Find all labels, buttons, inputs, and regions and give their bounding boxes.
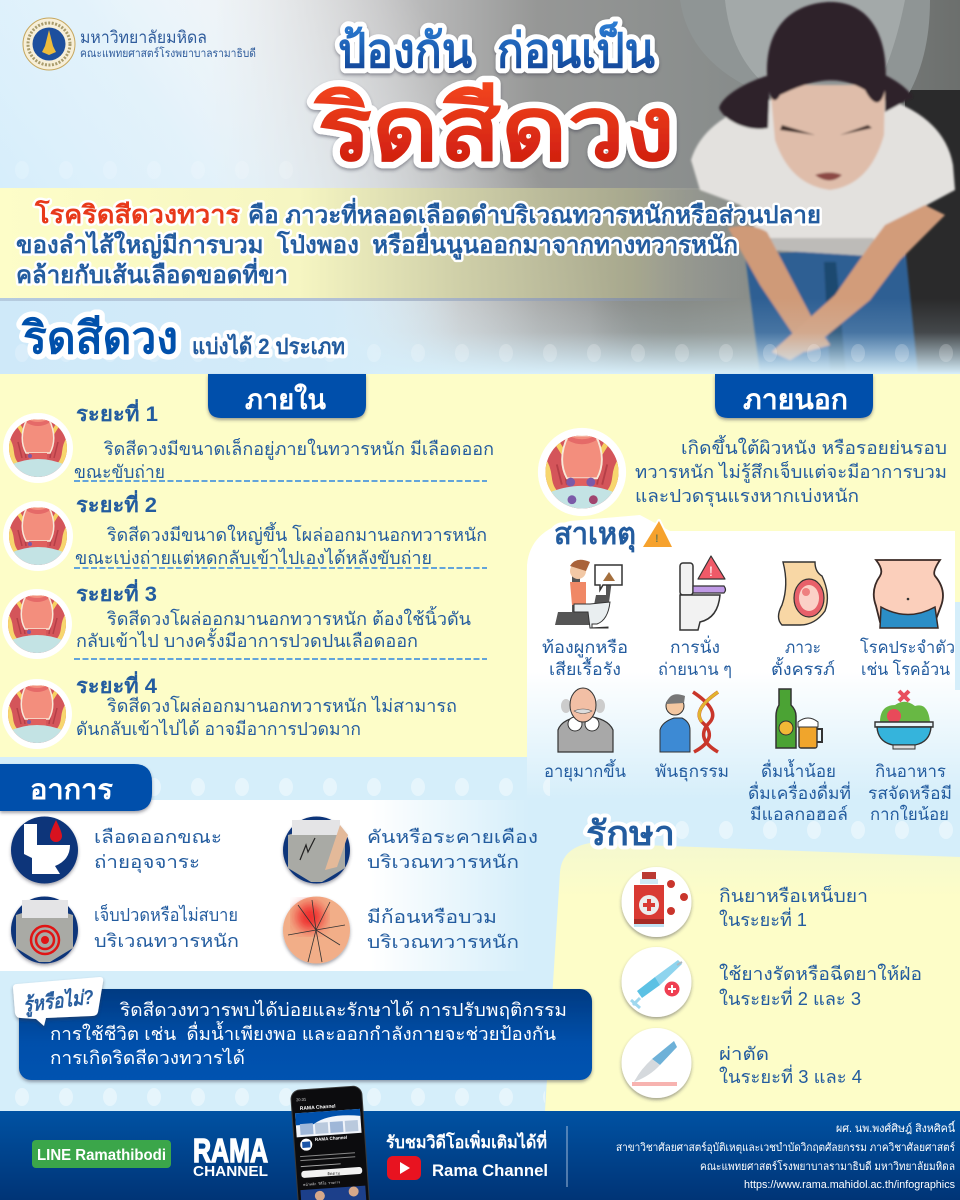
heading: causes: ! bbox=[655, 533, 659, 545]
symptom: pain bbox=[11, 896, 239, 964]
stage 2: ระยะที่ 2 bbox=[76, 489, 157, 517]
cause: constipation bbox=[542, 560, 628, 679]
stage 1 bbox=[3, 398, 494, 483]
phone mockup: 20:31 bbox=[296, 1097, 307, 1102]
heading: treatment: รักษา bbox=[586, 815, 675, 853]
badge: LINE: LINE Ramathibodi bbox=[37, 1147, 166, 1164]
cause: low fiber food: กากใยน้อย bbox=[870, 804, 949, 824]
tab: internal bbox=[208, 374, 366, 418]
panel: external type bbox=[538, 374, 947, 516]
callout: did you know: ริดสีดวงทวารพบได้บ่อยและรักษาได้ การปรับพฤติกรรม bbox=[120, 999, 567, 1020]
title: ป้องกัน ก่อนเป็น bbox=[338, 21, 655, 78]
symptom: lump bbox=[283, 896, 519, 964]
cause: constipation: ท้องผูกหรือ bbox=[542, 638, 628, 658]
heading: two types bbox=[21, 314, 345, 363]
stage 3: ระยะที่ 3 bbox=[76, 578, 157, 606]
callout: did you know: การเกิดริดสีดวงทวารได้ bbox=[50, 1047, 245, 1068]
symptom: itching bbox=[283, 816, 538, 884]
phone mockup: RAMA Channel bbox=[315, 1135, 347, 1142]
title bbox=[313, 21, 675, 180]
stage 2 bbox=[3, 489, 487, 571]
illustration: woman bent over in pain bbox=[691, 2, 955, 374]
panel: internal stages bbox=[2, 374, 494, 749]
stage 2: ริดสีดวงมีขนาดใหญ่ขึ้น โผล่ออกมานอกทวารหนัก bbox=[107, 522, 487, 545]
cause: pregnancy: ภาวะ bbox=[785, 638, 821, 657]
cause: low fiber food bbox=[868, 691, 952, 824]
stage 1: ขณะขับถ่าย bbox=[74, 462, 165, 482]
stage 4 bbox=[2, 670, 457, 749]
cause: obesity bbox=[860, 560, 955, 679]
cause: alcohol: ดื่มน้ำน้อย bbox=[761, 759, 836, 781]
hero fade to blue bbox=[0, 298, 960, 374]
symptom: lump: บริเวณทวารหนัก bbox=[367, 932, 519, 952]
cause: alcohol: ดื่มเครื่องดื่มที่ bbox=[748, 781, 851, 803]
symptom: bleeding: ถ่ายอุจจาระ bbox=[94, 852, 200, 873]
treatment: injection: ในระยะที่ 2 และ 3 bbox=[719, 986, 861, 1009]
treatment: injection: ใช้ยางรัดหรือฉีดยาให้ฝ่อ bbox=[719, 963, 922, 984]
cause: alcohol bbox=[748, 689, 851, 824]
cause: long sitting: ถ่ายนาน ๆ bbox=[658, 660, 732, 679]
intro text bbox=[16, 197, 821, 289]
cause: genetics: พันธุกรรม bbox=[655, 762, 729, 782]
cause: obesity: เช่น โรคอ้วน bbox=[861, 659, 950, 679]
heading: two types: แบ่งได้ 2 ประเภท bbox=[192, 333, 345, 359]
speech bubble bbox=[13, 977, 103, 1026]
stage 4: ดันกลับเข้าไปได้ อาจมีอาการปวดมาก bbox=[76, 718, 361, 739]
credits: ผศ. นพ.พงศ์ศิษฎ์ สิงหศิคนี์ bbox=[836, 1120, 956, 1135]
cause: pregnancy bbox=[771, 562, 835, 679]
icon: YouTube bbox=[387, 1156, 421, 1180]
stage 1: ริดสีดวงมีขนาดเล็กอยู่ภายในทวารหนัก มีเลือดออก bbox=[104, 437, 494, 460]
heading: causes: สาเหตุ bbox=[554, 518, 636, 553]
tab: symptoms: อาการ bbox=[30, 774, 113, 805]
logo: Rama Channel: RAMA bbox=[193, 1132, 268, 1169]
symptom: bleeding: เลือดออกขณะ bbox=[94, 827, 222, 847]
panel: causes bbox=[542, 518, 955, 824]
cause: low fiber food: กินอาหาร bbox=[875, 762, 946, 781]
treatment: injection bbox=[622, 947, 922, 1017]
title: ริดสีดวง bbox=[313, 80, 675, 180]
footer bbox=[0, 1086, 960, 1200]
heading: two types: ริดสีดวง bbox=[21, 314, 178, 363]
cause: low fiber food: รสจัดหรือมี bbox=[868, 784, 952, 803]
symptom: lump: มีก้อนหรือบวม bbox=[367, 907, 497, 927]
tab: external bbox=[715, 374, 873, 418]
treatment: medicine bbox=[622, 867, 868, 937]
callout: did you know bbox=[13, 977, 592, 1080]
video call to action: Rama Channel bbox=[432, 1161, 548, 1180]
credits bbox=[616, 1120, 956, 1191]
treatment: surgery: ในระยะที่ 3 และ 4 bbox=[719, 1064, 862, 1087]
tab: external: ภายนอก bbox=[743, 384, 848, 415]
icon: external hemorrhoid bbox=[538, 428, 626, 516]
phone mockup bbox=[290, 1086, 370, 1200]
logo: Rama Channel: CHANNEL bbox=[193, 1163, 268, 1180]
external description: ทวารหนัก ไม่รู้สึกเจ็บแต่จะมีอาการบวม bbox=[635, 460, 947, 483]
stage 4: ระยะที่ 4 bbox=[76, 670, 157, 698]
cause: old age bbox=[544, 688, 626, 782]
phone mockup: RAMA Channel bbox=[300, 1103, 336, 1112]
treatment: surgery: ผ่าตัด bbox=[719, 1044, 769, 1064]
logo: คณะแพทยศาสตร์โรงพยาบาลรามาธิบดี bbox=[80, 46, 256, 60]
treatment: medicine: กินยาหรือเหน็บยา bbox=[719, 884, 868, 906]
external description: เกิดขึ้นใต้ผิวหนัง หรือรอยย่นรอบ bbox=[681, 435, 947, 458]
badge: LINE bbox=[32, 1140, 171, 1168]
cause: obesity: โรคประจำตัว bbox=[860, 637, 955, 657]
cause: long sitting bbox=[658, 556, 732, 679]
stage 3: กลับเข้าไป บางครั้งมีอาการปวดปนเลือดออก bbox=[76, 628, 418, 651]
cause: long sitting: ! bbox=[709, 563, 713, 579]
intro text: โรคริดสีดวงทวาร bbox=[34, 199, 241, 229]
external description: และปวดรุนแรงหากเบ่งหนัก bbox=[635, 486, 859, 507]
cause: old age: อายุมากขึ้น bbox=[544, 759, 626, 782]
phone mockup: ติดตาม bbox=[327, 1170, 341, 1176]
panel: causes background bbox=[527, 515, 960, 800]
logo bbox=[23, 18, 256, 70]
symptom: itching: คันหรือระคายเคือง bbox=[367, 827, 538, 847]
video call to action: รับชมวิดีโอเพิ่มเติมได้ที่ bbox=[386, 1130, 547, 1152]
panel: treatment bbox=[545, 815, 960, 1111]
hero photo background bbox=[0, 0, 960, 374]
symptom: pain: บริเวณทวารหนัก bbox=[94, 931, 239, 951]
stage 3 bbox=[2, 578, 471, 659]
phone mockup: หน้าหลัก วิดีโอ รายการ bbox=[303, 1179, 340, 1187]
logo: มหาวิทยาลัยมหิดล bbox=[80, 28, 207, 47]
symptom: pain: เจ็บปวดหรือไม่สบาย bbox=[94, 903, 238, 925]
stage 4: ริดสีดวงโผล่ออกมานอกทวารหนัก ไม่สามารถ bbox=[107, 695, 457, 716]
logo: Rama Channel bbox=[193, 1132, 268, 1180]
cause: constipation: เสียเรื้อรัง bbox=[549, 657, 621, 679]
lower background dots bbox=[0, 777, 960, 1107]
cause: long sitting: การนั่ง bbox=[670, 635, 720, 657]
yellow content background bbox=[0, 374, 960, 602]
tab: internal: ภายใน bbox=[245, 383, 326, 415]
cause: genetics bbox=[655, 692, 729, 782]
video call to action bbox=[386, 1130, 548, 1180]
credits: https://www.rama.mahidol.ac.th/infographics bbox=[744, 1179, 955, 1191]
treatment: medicine: ในระยะที่ 1 bbox=[719, 907, 807, 930]
speech bubble: รู้หรือไม่? bbox=[22, 984, 95, 1018]
symptom: itching: บริเวณทวารหนัก bbox=[367, 852, 519, 872]
panel: symptoms bbox=[0, 764, 538, 971]
intro text: คล้ายกับเส้นเลือดขอดที่ขา bbox=[16, 257, 288, 289]
intro text: ของลำไส้ใหญ่มีการบวม โป่งพอง หรือยื่นนูนออกมาจากทางทวารหนัก bbox=[16, 227, 738, 260]
treatment: surgery bbox=[622, 1028, 862, 1098]
callout: did you know: การใช้ชีวิต เช่น ดื่มน้ำเพียงพอ และออกกำลังกายจะช่วยป้องกัน bbox=[50, 1021, 556, 1044]
heading: causes bbox=[554, 518, 672, 553]
stage 1: ระยะที่ 1 bbox=[76, 398, 158, 426]
stage 3: ริดสีดวงโผล่ออกมานอกทวารหนัก ต้องใช้นิ้วดัน bbox=[107, 606, 471, 629]
intro band background bbox=[0, 188, 745, 298]
tab: symptoms bbox=[0, 764, 152, 811]
cause: pregnancy: ตั้งครรภ์ bbox=[771, 657, 835, 679]
external description bbox=[635, 435, 947, 507]
intro text: คือ ภาวะที่หลอดเลือดดำบริเวณทวารหนักหรือส่วนปลาย bbox=[248, 197, 821, 229]
cause: alcohol: มีแอลกอฮอล์ bbox=[750, 805, 848, 824]
stage 2: ขณะเบ่งถ่ายแต่หดกลับเข้าไปเองได้หลังขับถ่าย bbox=[75, 547, 432, 568]
symptom: bleeding bbox=[11, 816, 222, 884]
